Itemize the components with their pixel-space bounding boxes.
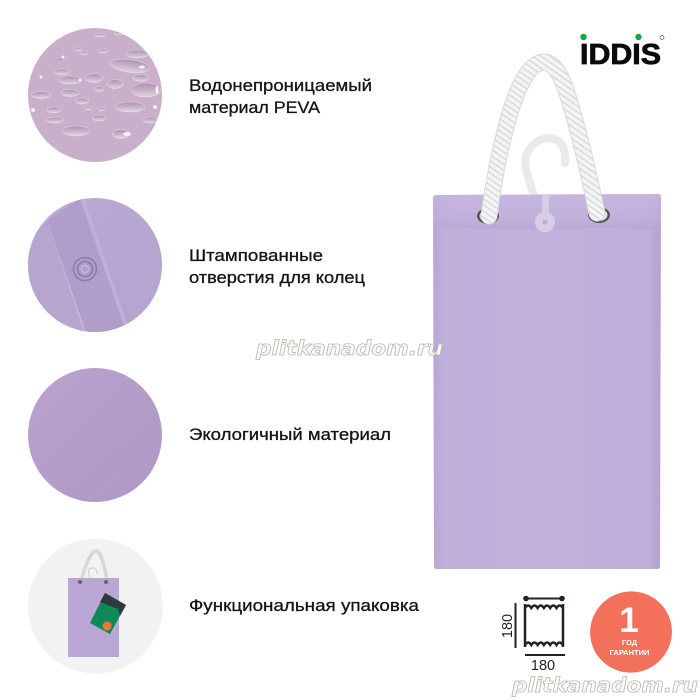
heading: waterproof material: материал PEVA — [189, 98, 321, 117]
icon: curtain size: 180 — [500, 614, 516, 638]
heading: eco material: Экологичный материал — [189, 425, 391, 444]
panel: eco material feature — [28, 368, 391, 502]
heading: stamped holes — [189, 246, 365, 287]
panel: waterproof feature — [28, 28, 372, 162]
watermark: bottom right: plitkanadom.ru — [511, 673, 698, 697]
heading: waterproof material: Водонепроницаемый — [189, 76, 372, 95]
badge: 1 year warranty: 1 — [619, 601, 639, 640]
logo: IDDIS: IDDIS — [580, 39, 661, 71]
left eyelet — [477, 208, 499, 224]
photo: packaged product — [28, 538, 163, 674]
panel: eyelet holes feature — [28, 198, 365, 332]
rope handle — [489, 62, 597, 216]
panel: packaging feature — [28, 538, 420, 674]
photo: material swatch — [28, 368, 162, 502]
photo: water droplets on PEVA — [28, 28, 162, 162]
icon: leaflet tag — [90, 593, 126, 634]
product: hanging curtain bag — [433, 62, 661, 569]
photo: stamped eyelet hole — [28, 198, 162, 332]
heading: waterproof material — [189, 76, 372, 117]
watermark: center: plitkanadom.ru — [255, 336, 443, 360]
hook — [525, 138, 565, 196]
heading: stamped holes: Штампованные — [189, 246, 323, 265]
heading: functional packaging: Функциональная упаковка — [189, 596, 420, 615]
badge: 1 year warranty — [577, 578, 685, 686]
icon: curtain size — [500, 596, 565, 674]
badge: 1 year warranty: ГОД — [622, 638, 638, 647]
heading: stamped holes: отверстия для колец — [189, 268, 365, 287]
badge: 1 year warranty: ГАРАНТИИ — [610, 648, 649, 657]
right eyelet — [588, 207, 610, 223]
bag body — [433, 194, 661, 569]
hook tab — [535, 194, 555, 232]
folded top band — [433, 194, 661, 230]
icon: curtain size: 180 — [531, 658, 555, 674]
